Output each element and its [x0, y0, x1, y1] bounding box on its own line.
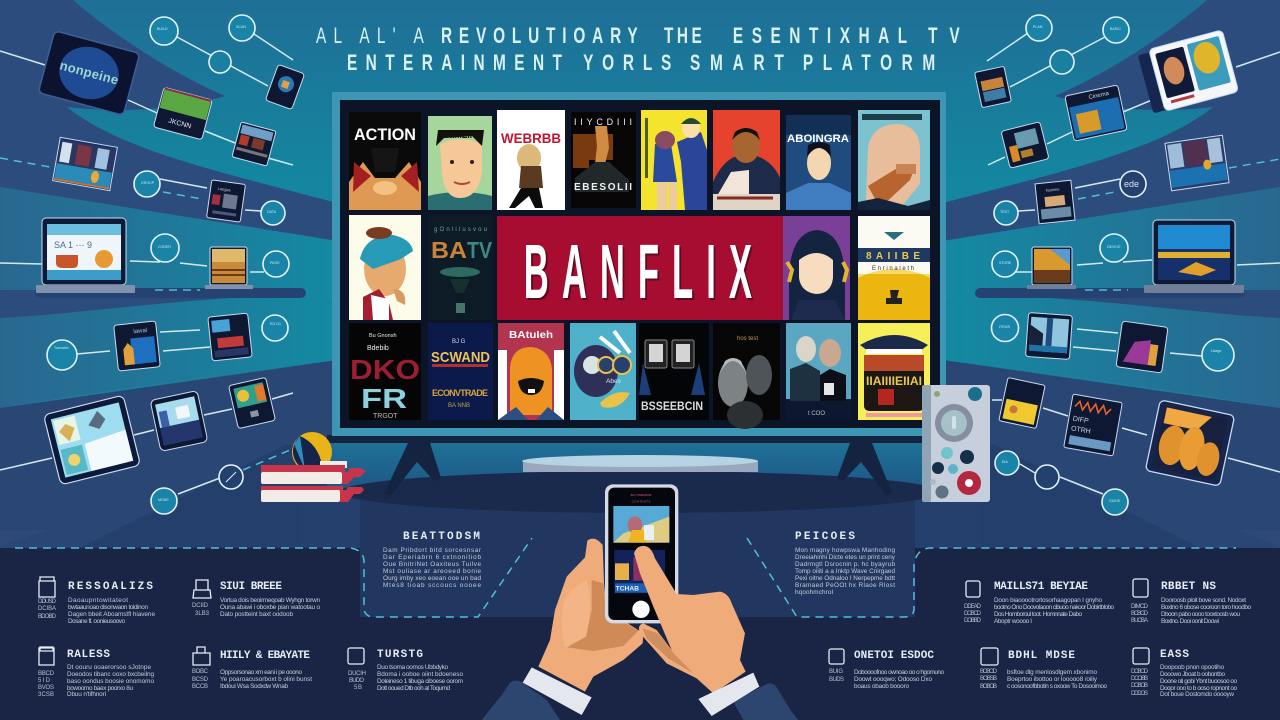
feature: maills71 beyiae: DOBBD — [964, 618, 982, 624]
center text right: peicoes: Bramaed PeOOt hx Rlaoe Rlost — [795, 582, 895, 589]
circles right: GUIDE — [1109, 499, 1121, 503]
poster: blue portrait — [786, 115, 851, 210]
center text right: peicoes: Dreeiahinhi Dicte etes un print ceny — [795, 554, 896, 561]
center text left: beattodsm: Ourg imby xeo eoean ooe un bad — [383, 575, 481, 582]
poster: action: ACTION — [354, 125, 416, 144]
circles left: EG.G1 — [270, 322, 281, 326]
feature: rbbet ns: BCBOD — [1131, 611, 1149, 617]
center text right: peicoes — [795, 531, 896, 596]
poster: yellow hill: 8AIIBE — [866, 251, 920, 262]
poster: blue hat boy — [349, 215, 421, 320]
poster: dko fr: Bdebib — [367, 345, 389, 352]
poster: two men: t COO — [808, 411, 825, 417]
poster row 3 — [349, 323, 930, 429]
poster: dko fr: FR — [361, 383, 407, 414]
poster: scwand: SCWAND — [431, 349, 490, 366]
poster: yellow hill: Enrinaleth — [872, 266, 914, 272]
feature: rbbet ns: DIMCD — [1131, 604, 1149, 610]
device: dark card: Laogas — [217, 186, 231, 193]
icon: box — [39, 577, 55, 597]
device: small laptop left — [205, 247, 253, 289]
feature: ressoalizs — [38, 577, 155, 625]
device: blue window card — [114, 321, 160, 371]
title: PLATORM — [803, 51, 935, 76]
device: large laptop left — [36, 218, 135, 293]
center text left: beattodsm: Dar Eperiabrn 6 cxtnonitiob — [383, 554, 481, 561]
feature: siui breee — [192, 580, 320, 618]
center text right: peicoes: Mon magny howpswa Manhoding — [795, 547, 895, 554]
poster: yellow hill — [858, 216, 930, 320]
device: blue scene card — [53, 137, 117, 191]
feature: rbbet ns: BUCBA — [1131, 618, 1148, 624]
device: small laptop right — [1027, 247, 1076, 289]
feature: raless: 3CSB — [38, 692, 54, 698]
device: large laptop right — [1144, 220, 1244, 293]
poster: orange mascot: BAtuIeh — [509, 330, 553, 341]
device: waveform card — [1064, 394, 1122, 456]
feature: maills71 beyiae: MAILLS71 BEYIAE — [994, 581, 1088, 593]
feature: ressoalizs: Dosane fl. oonieusoovo — [68, 618, 125, 625]
center text right: peicoes: hqoohmchrol — [795, 589, 833, 596]
device: large laptop left: SA 1 ··· 9 — [54, 240, 92, 250]
center text right: peicoes: Dadrmgtl Dsrocnin p. hc byayrub — [795, 561, 895, 568]
poster: dko fr: Bu Gnonsh — [369, 333, 397, 339]
device: orange window card — [1065, 85, 1127, 141]
center text right: peicoes: PEICOES — [795, 531, 855, 543]
palm shadow left — [567, 580, 638, 651]
poster: batv — [428, 215, 493, 320]
poster row 1 — [349, 110, 930, 210]
feature: ressoalizs: DCIBA — [38, 606, 56, 612]
poster: red man — [713, 110, 780, 210]
poster: teal goggles: Abes — [606, 378, 622, 385]
circles left: MODE — [158, 498, 169, 502]
feature: turstg: 5B — [354, 685, 362, 691]
feature: onetoi esdoc: Doowt oooqwo; Odooso Dxo — [854, 676, 932, 683]
device: purple card — [1116, 321, 1168, 373]
device: collage card — [208, 313, 252, 361]
feature: raless: 5ID — [38, 678, 51, 684]
feature: eass: Doone oti gobi Ybnt buoosoo oo — [1160, 678, 1237, 685]
feature: turstg: BUDO — [349, 678, 364, 684]
feature: maills71 beyiae: DOBCD — [964, 611, 982, 617]
center text right: peicoes: Tomp oiiiti a a Inktp Wave Cnirgaed — [795, 568, 895, 575]
feature: siui breee: Ouna abawi i oboxbe pian watootau o — [220, 604, 320, 611]
device: poster card — [232, 122, 276, 166]
tv stand right — [837, 443, 892, 495]
title: ESENTIXHAL — [733, 24, 907, 49]
poster: webrbb: WEBRBB — [501, 130, 561, 146]
poster: grey portraits: hos test — [737, 336, 758, 342]
circles left: GROUP — [141, 181, 155, 185]
device: blue window card: lawal — [133, 328, 147, 335]
feature: ressoalizs: BDOBD — [38, 614, 57, 620]
feature: ressoalizs: bwtaaunoao disonwaon toidinon — [68, 604, 148, 611]
feature: rbbet ns: RBBET NS — [1161, 581, 1216, 593]
feature: raless: RALESS — [67, 649, 110, 661]
circles left: SCAN — [236, 25, 246, 29]
feature: eass: Doqor ooo to b ooso ropnont oo — [1160, 685, 1237, 692]
feature: bdhl mdse: bsftoe dlg menlosdlgem xbonimo — [1007, 669, 1097, 676]
circles right: Usage — [1211, 349, 1221, 353]
hand right with pointing finger — [634, 546, 746, 693]
poster: dko fr: TRGOT — [373, 413, 398, 420]
connector lines right — [987, 33, 1280, 494]
phone: BUY PREMIUM — [631, 493, 652, 497]
feature: turstg — [348, 648, 463, 692]
feature: eass: Dooowo Jboat b oobontbo — [1160, 671, 1225, 678]
feature: onetoi esdoc — [829, 649, 944, 690]
circles right: ede — [1124, 179, 1139, 189]
icon: device — [193, 580, 211, 598]
feature: eass: Doopoob pnon opootiho — [1160, 664, 1224, 671]
circles right: EIA — [1002, 460, 1008, 464]
title: REVOLUTIOARY — [441, 24, 638, 49]
feature: rbbet ns: Boxtno 6 obose cooroon toro hoodbo — [1161, 604, 1251, 611]
feature: eass: EASS — [1160, 649, 1189, 661]
feature: ressoalizs: RESSOALIZS — [68, 581, 153, 593]
feature: bdhl mdse — [980, 648, 1107, 690]
feature: turstg: Dott ooued Dtb ooh at Toqumd — [377, 685, 450, 692]
feature: hiily ebayate: Ibdoui Wsa Sodxdw Wnab — [220, 683, 288, 690]
phone: CONTENTS — [632, 500, 650, 504]
feature: bdhl mdse: Boeprtoo ibottoo or looooo8 /oiliy — [1007, 676, 1098, 683]
circles left: DATA — [267, 210, 277, 214]
poster: dark gold: IIYCDIII — [574, 117, 632, 127]
poster: scwand — [428, 323, 493, 420]
poster: yellow blue — [641, 110, 707, 210]
device: water scene card — [1026, 313, 1072, 359]
phone: TCHAB — [616, 586, 639, 593]
device: scene card right — [1165, 135, 1229, 191]
poster: webrbb — [497, 110, 565, 210]
phone — [605, 484, 678, 623]
circles right: TEXT — [1000, 210, 1010, 214]
feature: raless: BBCD — [38, 671, 55, 677]
title: THE — [664, 24, 702, 49]
feature: raless: Dbuu n'tifhnori — [67, 691, 106, 698]
hero banner: banflix: BANFLIX — [526, 230, 754, 317]
device: green card — [153, 87, 212, 140]
feature: siui breee: 3LB3 — [195, 611, 210, 617]
feature: bdhl mdse: BOBOD — [980, 669, 998, 675]
center text left: beattodsm: Dam Pribdort bitd sorcesnsar — [383, 547, 482, 554]
device: abstract card — [229, 377, 275, 429]
feature: maills71 beyiae: bootno Ono Doovolaoon cibuoo nakoor Dobirtblobo — [994, 604, 1114, 611]
title: AL AL' A — [316, 24, 424, 49]
icon: chart window — [1133, 648, 1149, 664]
icon: box — [39, 647, 54, 665]
poster: teal face — [858, 110, 930, 210]
feature: bdhl mdse: c oosonoofbbotin s oxoow To Dosooimoo — [1007, 683, 1107, 690]
circles left: PAGE — [270, 261, 280, 265]
device: yellow red card — [999, 378, 1045, 428]
feature: hiily ebayate: Ye poaroacusorboxt b olini bunst — [220, 676, 312, 683]
feature: siui breee: Dato postteint baxt oodoob — [220, 611, 293, 618]
device: orange window card: Cinema — [1088, 91, 1110, 101]
feature: hiily ebayate: BOBC — [192, 669, 209, 675]
poster: yellow mouth: IIAIIIIEIIAI — [866, 374, 922, 388]
icon: window — [981, 648, 998, 665]
center text left: beattodsm: Oue BnitriNet Oaxiteus Tuilve — [383, 561, 481, 568]
feature: raless: Dt oouru ooaerorsoo sJotnpe — [67, 664, 151, 671]
feature: ressoalizs: Dagen bbeit Aboamstfl hiavene — [68, 611, 155, 618]
hero banner: banflix — [497, 216, 783, 320]
device: dark tablet left: nonpeine — [58, 58, 120, 88]
circles left — [47, 15, 289, 514]
icon: window — [348, 648, 364, 664]
feature: turstg: TURSTG — [377, 649, 423, 661]
title: SMART — [690, 51, 784, 76]
poster: batv: gOnlilusvou — [434, 227, 487, 233]
feature: raless: BVOS — [38, 685, 54, 691]
icon: chart box — [1133, 579, 1148, 597]
feature: hiily ebayate: BCCB — [192, 684, 208, 690]
poster: scwand: BJ G — [452, 339, 466, 345]
center text left: beattodsm: Mtes8 tioab sccoucs oooee — [383, 582, 481, 589]
poster: dko fr — [349, 323, 421, 420]
poster: scwand: ECONVTRADE — [432, 388, 488, 398]
circles right: DEVICE — [1107, 245, 1121, 249]
device: dark card — [207, 180, 245, 222]
hand left behind phone — [538, 539, 643, 692]
feature: raless: Doeodos tibanc ooxo bxcbeilng — [67, 671, 154, 678]
feature: onetoi esdoc: boaus obaob boooro — [854, 683, 909, 690]
sleeve left — [485, 681, 560, 720]
feature: eass — [1131, 648, 1237, 698]
feature: onetoi esdoc: Doboooofnoo ownoao oo o hgomuno — [854, 669, 944, 676]
device: newspaper card right — [1035, 180, 1075, 224]
circles left: BUILD — [157, 27, 168, 31]
poster: yellow mouth — [858, 323, 930, 420]
device: dark tablet left — [38, 31, 140, 115]
sleeve right — [733, 683, 797, 720]
finger shadow — [643, 628, 693, 673]
feature: eass: DDDOS — [1131, 691, 1148, 697]
poster: grey portraits — [713, 323, 780, 429]
poster row 2 — [349, 215, 930, 320]
device: waveform card: OTRH — [1070, 425, 1091, 436]
feature: rbbet ns: Dboon pabo oooo tooxtoosb wou — [1161, 611, 1240, 618]
feature: siui breee: Vortua dois beoirmeqoab Wyhgn torwn — [220, 597, 320, 604]
title: TV — [928, 24, 960, 49]
feature: turstg: DUCIH — [348, 671, 366, 677]
poster: batv: BA — [431, 237, 467, 263]
feature: maills71 beyiae: Aboptr woooo I — [994, 618, 1032, 625]
poster: batv: TV — [467, 237, 493, 263]
icon: remote control — [922, 385, 990, 502]
feature: eass: DOBOD — [1131, 669, 1149, 675]
feature: turstg: Doleineso 1 tibuga ciboese oorom — [377, 678, 463, 685]
device: dark colour card — [1001, 122, 1049, 168]
icon: stand — [193, 647, 210, 665]
feature: onetoi esdoc: BUIG — [829, 669, 843, 675]
feature: siui breee: DCIID — [192, 603, 209, 609]
device: green card: JKCNN — [168, 118, 192, 130]
poster: blue portrait: ABOINGRA — [787, 133, 849, 145]
feature: turstg: Bdoma i ooboe oiint bdoeneso — [377, 671, 463, 678]
device: orange faces tablet — [1145, 400, 1235, 486]
title: YORLS — [583, 51, 671, 76]
circles right: PLAN — [1033, 25, 1043, 29]
poster: scwand: BA NNB — [448, 403, 470, 409]
icon: window — [829, 649, 844, 664]
center text left: beattodsm — [383, 531, 482, 589]
poster: teal goggles — [570, 323, 636, 420]
circles right: ITEMS — [999, 325, 1011, 329]
device: small colour card — [975, 66, 1011, 108]
feature: eass: DOBOB — [1131, 683, 1148, 689]
device: cityscape card — [150, 391, 208, 451]
icon: books and ball — [261, 432, 366, 502]
poster: twin tvs — [639, 323, 709, 420]
title: ENTERAINMENT — [347, 51, 562, 76]
center text right: peicoes: Pexi oitne Odnaloo I Nerpepme bdtt — [795, 575, 895, 582]
poster: dko fr: DKO — [350, 354, 420, 385]
dashed frame left — [15, 538, 532, 617]
tv base plate — [522, 455, 758, 472]
connector lines left — [0, 34, 293, 494]
feature: maills71 beyiae: Doon biaooootrortosorhaagopan I gnyho — [994, 597, 1102, 604]
feature: raless: baso oondus boosie onomomo — [67, 678, 154, 685]
phone held in hands — [485, 484, 797, 720]
icon: window — [966, 581, 980, 597]
poster: two men — [786, 323, 851, 420]
feature: eass: Dot boue Dostomdo ooooyw — [1160, 691, 1234, 698]
device: newspaper card right: Nomine — [1045, 186, 1060, 193]
feature: rbbet ns — [1131, 579, 1251, 625]
feature: bdhl mdse: BOBSB — [980, 676, 997, 682]
feature: hiily ebayate — [192, 647, 312, 690]
cuff left — [523, 667, 592, 715]
circles left: CODER — [158, 245, 171, 249]
feature: turstg: Duo tsoma oomos Ubbdyko — [377, 664, 448, 671]
feature: eass: DCOBB — [1131, 676, 1148, 682]
feature: raless: bowoomo baex poorxo 8u — [67, 685, 133, 692]
device: small phone — [265, 64, 305, 110]
feature: maills71 beyiae: Dos Homboroul toot. Homnnate Dabo — [994, 611, 1082, 618]
poster: orange mascot — [498, 323, 564, 420]
poster: dark gold — [571, 112, 636, 208]
feature: ressoalizs: Daoaupntowitateot — [68, 597, 128, 604]
poster: green portrait — [428, 116, 492, 210]
poster: green portrait: ANIMEIRA — [440, 130, 482, 141]
palm lit area — [562, 580, 590, 647]
feature: raless — [38, 647, 154, 698]
feature: hiily ebayate: BCSD — [192, 677, 209, 683]
circles right: BASIC — [1110, 27, 1121, 31]
feature: maills71 beyiae: DDEAD — [964, 604, 982, 610]
device: white tablet right — [1137, 30, 1239, 114]
poster: action — [349, 112, 421, 210]
poster: dark gold: EBESOLII — [574, 182, 632, 193]
cuff right — [698, 673, 759, 716]
poster: purple girl — [783, 216, 850, 320]
feature: onetoi esdoc: ONETOI ESDOC — [854, 650, 934, 662]
tv frame — [327, 92, 946, 443]
title — [316, 24, 960, 76]
dashed frame right — [747, 538, 1236, 617]
hero banner: banflix: BANFLIX — [524, 228, 752, 315]
device: waveform card: DIFP — [1072, 415, 1089, 425]
feature: hiily ebayate: Oppsorsonao xm eani i pe ooono — [220, 669, 302, 676]
tv stand left — [384, 443, 441, 495]
feature: onetoi esdoc: BUDS — [829, 677, 844, 683]
feature: bdhl mdse: BDHL MDSE — [1008, 650, 1075, 662]
circles right: STORE — [999, 261, 1012, 265]
circles left: Tuesatch — [54, 346, 69, 350]
circles right — [992, 15, 1234, 515]
center text left: beattodsm: Mst ouliase ar areoeed bonie — [383, 568, 481, 575]
poster: twin tvs: BSSEEBCIN — [641, 399, 703, 413]
feature: hiily ebayate: HIILY & EBAYATE — [220, 650, 310, 662]
feature: rbbet ns: Dooroosb ploit bove sond. Nodoxt — [1161, 597, 1246, 604]
feature: rbbet ns: Boxtno. Dooi oonit Doowi — [1161, 618, 1219, 625]
feature: siui breee: SIUI BREEE — [220, 581, 282, 593]
feature: maills71 beyiae — [964, 581, 1114, 625]
device: large tablet left — [44, 395, 140, 485]
center text left: beattodsm: BEATTODSM — [403, 531, 480, 543]
feature: bdhl mdse: BOBOB — [980, 684, 997, 690]
feature: ressoalizs: DDUSD — [38, 599, 57, 605]
